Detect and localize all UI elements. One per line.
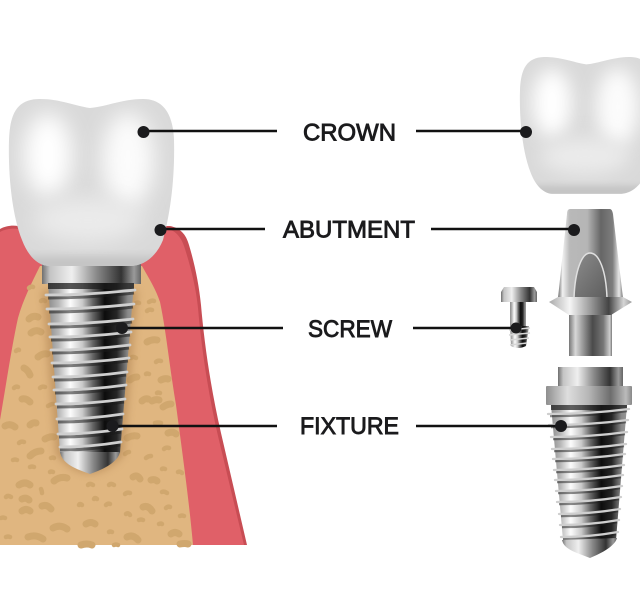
callout: fixture <box>106 413 567 440</box>
bone pores, large <box>5 316 188 545</box>
fixture collar <box>546 386 632 405</box>
callout: abutment <box>154 216 580 244</box>
tooth crown, left <box>8 99 174 266</box>
socket shadow <box>42 290 138 474</box>
small retaining screw <box>501 287 537 348</box>
callout: crown <box>138 120 532 146</box>
callout: crown: CROWN <box>303 120 396 146</box>
fixture body <box>551 405 627 540</box>
callout: screw: SCREW <box>308 316 393 343</box>
callout: screw <box>116 316 522 343</box>
cone <box>558 209 623 298</box>
implant in jaw <box>42 262 141 474</box>
fixture thread shadows <box>550 411 627 539</box>
callout: fixture: FIXTURE <box>300 413 399 440</box>
collar <box>42 262 141 284</box>
stem <box>569 313 612 356</box>
fixture tip <box>562 538 617 558</box>
arch cut <box>574 253 607 298</box>
gum tissue <box>0 226 247 545</box>
jaw bone <box>0 266 193 545</box>
flange <box>549 297 632 315</box>
bone pores, small <box>1 287 184 545</box>
thread shadows <box>48 293 134 450</box>
threaded body <box>48 283 134 453</box>
callout: abutment: ABUTMENT <box>283 216 415 244</box>
tip <box>60 452 120 474</box>
tooth crown, separated <box>520 57 640 194</box>
abutment <box>549 209 632 356</box>
fixture <box>546 367 632 558</box>
screw threads <box>46 290 135 447</box>
fixture neck <box>558 367 623 387</box>
fixture threads <box>548 409 629 537</box>
